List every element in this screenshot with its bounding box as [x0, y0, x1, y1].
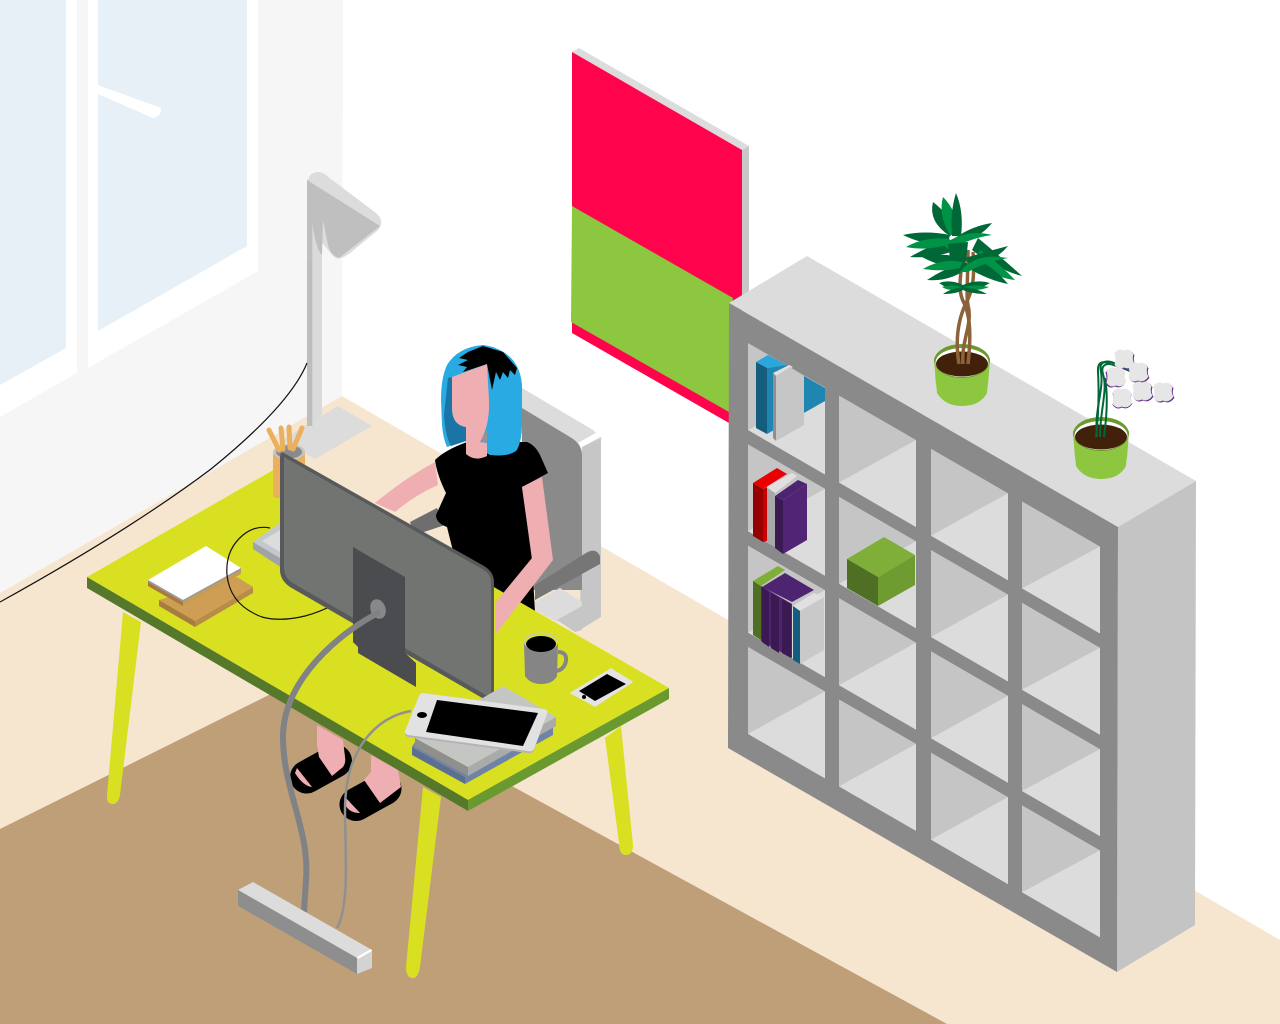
rug	[0, 675, 947, 1024]
thin black monitor cable	[227, 527, 333, 619]
woman's left arm	[375, 462, 438, 512]
wall poster	[571, 48, 749, 440]
shelf side	[1117, 481, 1196, 972]
shelf cell floors	[748, 388, 1100, 937]
power cable from lamp	[0, 363, 307, 602]
coffee mug	[524, 632, 566, 684]
left wall with window	[0, 0, 343, 593]
desk	[87, 465, 669, 811]
monitor	[280, 453, 494, 701]
smartphone	[571, 669, 632, 706]
monitor stand	[353, 547, 416, 687]
power strip	[238, 882, 372, 974]
monitor back	[284, 457, 491, 698]
shelf cell backs	[748, 343, 1100, 937]
monitor shell	[280, 453, 494, 701]
books: second shelf	[753, 468, 807, 554]
monitor cable port	[368, 597, 388, 621]
tablet	[405, 693, 548, 753]
desk legs	[107, 612, 633, 978]
orchid stems	[1096, 362, 1150, 437]
thin tablet cable	[337, 711, 411, 928]
pencil cup	[269, 427, 305, 498]
shelf top	[729, 256, 1196, 527]
floor lamp	[282, 172, 381, 459]
keyboard behind monitor	[253, 523, 300, 580]
woman's legs and sandals	[295, 725, 401, 813]
bookshelf	[728, 256, 1196, 972]
office chair	[410, 388, 602, 632]
thick monitor cable	[283, 612, 380, 912]
tree leaves	[903, 193, 1022, 294]
orchid pot	[1073, 417, 1129, 479]
tree trunk	[957, 250, 974, 364]
woman's right arm	[495, 477, 553, 635]
tree pot	[934, 344, 990, 406]
potted orchid	[1073, 350, 1174, 479]
books: top shelf	[756, 355, 825, 441]
shelf front frame	[728, 303, 1118, 972]
white notebook on wooden boards	[148, 546, 253, 627]
woman's black shirt	[435, 442, 548, 612]
books: third shelf	[753, 566, 824, 664]
floor	[0, 396, 1280, 1024]
potted tree	[903, 193, 1022, 406]
woman's head and hair	[441, 345, 522, 459]
orchid flowers	[1106, 350, 1174, 408]
green storage box	[847, 537, 915, 606]
stack of books under tablet	[412, 686, 556, 784]
